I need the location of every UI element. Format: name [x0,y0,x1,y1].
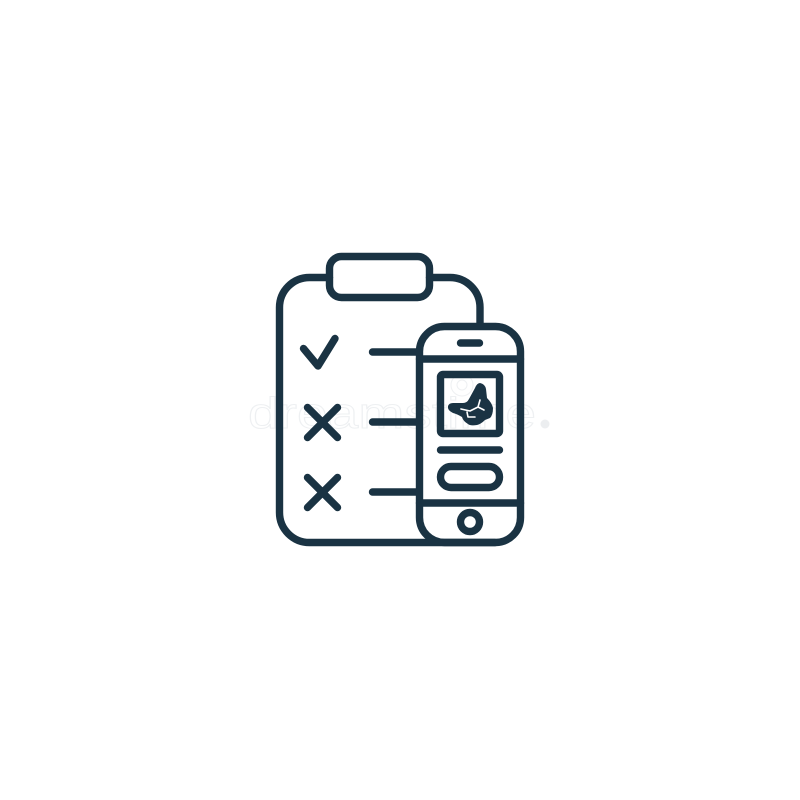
icon: butterfly [448,383,493,425]
icon: check mark [304,338,335,366]
icon: first cross mark [308,408,338,438]
watermark: dreamstime [248,389,536,438]
clipboard board outline [280,278,495,542]
checklist lines [372,352,417,492]
phone button [440,466,500,488]
phone screen dividers [420,359,520,503]
icon: second cross mark [308,478,338,508]
phone body [420,326,520,542]
phone text line [440,446,500,454]
phone home button [460,512,480,532]
phone speaker [460,339,480,347]
clipboard clip [330,256,430,298]
phone image frame [440,374,500,434]
watermark [248,374,550,438]
